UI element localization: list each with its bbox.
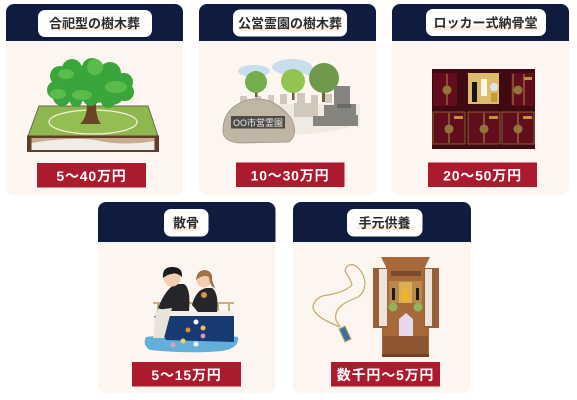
price: 5〜15万円: 5〜15万円 <box>151 367 222 383</box>
illustration: scattering ashes at sea from a boat <box>145 267 238 352</box>
panel: 散骨 <box>98 202 276 393</box>
price: 5〜40万円 <box>37 163 146 188</box>
panel: 公営霊園の樹木葬 <box>199 4 376 195</box>
illustration: locker columbarium <box>432 69 535 149</box>
heading: ロッカー式納骨堂: ロッカー式納骨堂 <box>433 16 538 30</box>
price: 数千円〜5万円 <box>331 362 440 386</box>
heading: 合祀型の樹木葬 <box>38 10 152 37</box>
illustration: public cemetery with trees and stone sign <box>223 59 360 143</box>
heading: 公営霊園の樹木葬 <box>233 10 347 36</box>
sign: OO市営霊園: OO市営霊園 <box>233 117 283 128</box>
heading: 合祀型の樹木葬: 合祀型の樹木葬 <box>49 16 140 31</box>
panel: 手元供養 <box>293 202 471 393</box>
price: 数千円〜5万円: 数千円〜5万円 <box>337 367 434 383</box>
heading: ロッカー式納骨堂 <box>426 9 546 36</box>
panel: 合祀型の樹木葬 <box>6 4 183 195</box>
price: 5〜40万円: 5〜40万円 <box>56 168 127 184</box>
heading: 散骨 <box>164 209 208 236</box>
price: 5〜15万円 <box>132 362 241 386</box>
illustration: memorial necklace <box>313 265 365 342</box>
illustration: home Buddhist altar <box>373 257 439 357</box>
heading: 公営霊園の樹木葬: 公営霊園の樹木葬 <box>238 16 342 31</box>
price: 10〜30万円 <box>236 162 344 187</box>
illustration: tree on a burial plot <box>27 58 159 152</box>
heading: 手元供養 <box>347 209 422 236</box>
price: 20〜50万円: 20〜50万円 <box>443 168 522 184</box>
panel: ロッカー式納骨堂 <box>392 4 569 195</box>
heading: 散骨: 散骨 <box>173 216 199 230</box>
heading: 手元供養: 手元供養 <box>358 216 411 230</box>
price: 10〜30万円: 10〜30万円 <box>251 168 329 184</box>
price: 20〜50万円 <box>428 162 537 187</box>
